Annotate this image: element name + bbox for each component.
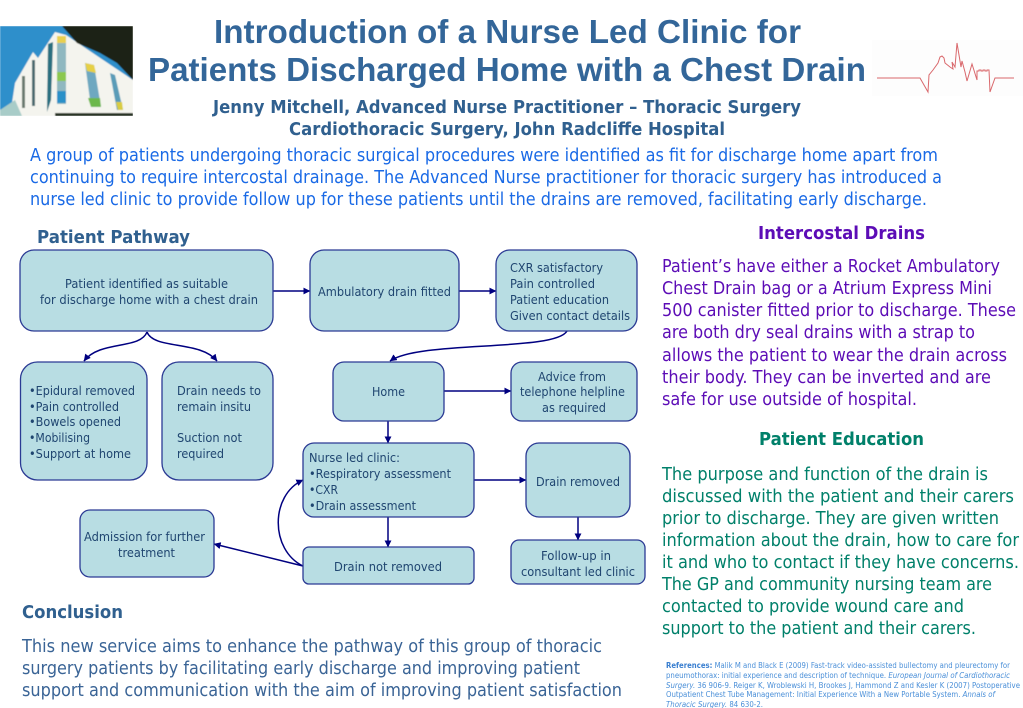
box: telephone helpline advice: telephone helpline (520, 384, 625, 399)
intercostal drains text: Chest Drain bag or a Atrium Express Mini (662, 279, 992, 299)
box: follow-up in consultant led clinic: consultant led clinic (521, 564, 635, 579)
box: CXR satisfactory: CXR satisfactory (510, 260, 604, 275)
box: follow-up in consultant led clinic (511, 540, 645, 584)
patient education text: support to the patient and their carers. (662, 619, 976, 639)
box: telephone helpline advice: Advice from (538, 369, 606, 384)
arrow: drain removed to follow-up (577, 517, 579, 540)
references (666, 661, 1020, 708)
arrow: home to advice (444, 390, 511, 392)
arrow: identified to ambulatory drain (273, 290, 310, 292)
box: drain removed: Drain removed (536, 474, 620, 489)
intercostal drains text: are both dry seal drains with a strap to (662, 323, 975, 343)
box: discharge criteria: •Mobilising (29, 430, 90, 445)
arrow: home to nurse led clinic (387, 421, 389, 443)
box: drain needs to remain: Suction not (177, 430, 242, 445)
arrow: CXR box to home (390, 331, 567, 361)
box: CXR satisfactory (496, 250, 637, 331)
box: home (333, 362, 444, 421)
logo: ECG heartbeat line (872, 40, 1023, 96)
references: pneumothorax: initial experience and description of technique. European Journal of Cardiothoracic (666, 671, 1011, 680)
arrow: ambulatory drain to CXR (459, 290, 496, 292)
intercostal drains text: safe for use outside of hospital. (662, 390, 917, 410)
arrow: nurse led clinic to drain not removed (387, 517, 389, 547)
introduction text: A group of patients undergoing thoracic surgical procedures were identified as fit for discharge home apart from (30, 146, 938, 166)
heading: Conclusion: Conclusion (22, 603, 123, 623)
box: nurse led clinic (303, 443, 474, 517)
patient education text: The purpose and function of the drain is (661, 465, 988, 485)
box: nurse led clinic: •Drain assessment (309, 498, 416, 513)
box: patient identified: for discharge home with a chest drain (40, 292, 258, 307)
box: drain needs to remain: remain insitu (177, 399, 251, 414)
heading: Patient Pathway: Patient Pathway (37, 228, 191, 248)
box: nurse led clinic: Nurse led clinic: (309, 450, 400, 465)
intercostal drains text: their body. They can be inverted and are (662, 368, 991, 388)
arrow: drain not removed to admission (214, 544, 303, 566)
title: Patients Discharged Home with a Chest Drain (148, 51, 866, 88)
references: Outpatient Chest Tube Management: Initial Experience With a New Portable System. Annals of (666, 690, 996, 699)
title: Introduction of a Nurse Led Clinic for (214, 13, 801, 50)
box: discharge criteria: •Bowels opened (29, 414, 121, 429)
box: drain not removed: Drain not removed (334, 559, 442, 574)
intercostal drains text: Patient’s have either a Rocket Ambulatory (662, 257, 1000, 277)
box: patient identified (20, 250, 273, 331)
arrow: drain not removed back to clinic (278, 480, 303, 566)
box: drain needs to remain (162, 362, 273, 480)
box: discharge criteria: •Pain controlled (29, 399, 119, 414)
authors and affiliation: Cardiothoracic Surgery, John Radcliffe Hospital (289, 120, 725, 140)
box: admission for further treatment: treatment (118, 545, 175, 560)
box: CXR satisfactory: Given contact details (510, 308, 630, 323)
box: admission for further treatment: Admission for further (84, 529, 206, 544)
photo: hospital building (0, 26, 133, 116)
introduction text: nurse led clinic to provide follow up for these patients until the drains are removed, facilitating early discharge. (30, 190, 927, 210)
introduction text: continuing to require intercostal drainage. The Advanced Nurse practitioner for thoracic surgery has introduced a (30, 168, 942, 188)
arrow: identified to drain insitu box (147, 332, 217, 361)
box: ambulatory drain fitted (310, 250, 459, 331)
box: nurse led clinic: •Respiratory assessment (309, 466, 451, 481)
conclusion text: surgery patients by facilitating early discharge and improving patient (22, 659, 580, 679)
box: drain removed (526, 443, 630, 517)
conclusion text: support and communication with the aim of improving patient satisfaction (22, 681, 622, 701)
box: telephone helpline advice: as required (542, 400, 606, 415)
box: discharge criteria (20, 362, 147, 480)
conclusion text (21, 637, 622, 701)
patient education text (661, 465, 1020, 639)
box: admission for further treatment (80, 510, 214, 577)
box: nurse led clinic: •CXR (309, 482, 338, 497)
introduction text (30, 146, 942, 210)
intercostal drains text (662, 257, 1016, 410)
box: drain needs to remain: Drain needs to (177, 383, 261, 398)
box: ambulatory drain fitted: Ambulatory drain fitted (318, 284, 451, 299)
box: patient identified: Patient identified as suitable (65, 276, 228, 291)
conclusion text: This new service aims to enhance the pathway of this group of thoracic (21, 637, 602, 657)
heading: Patient Education: Patient Education (759, 430, 924, 450)
arrow: identified to epidural box (84, 332, 147, 361)
patient education text: contacted to provide wound care and (662, 597, 964, 617)
patient education text: prior to discharge. They are given written (662, 509, 999, 529)
box: discharge criteria: •Support at home (29, 446, 131, 461)
box: drain needs to remain: required (177, 446, 224, 461)
box: CXR satisfactory: Patient education (510, 292, 609, 307)
heading: Intercostal Drains: Intercostal Drains (758, 224, 925, 244)
patient education text: The GP and community nursing team are (661, 575, 992, 595)
authors and affiliation: Jenny Mitchell, Advanced Nurse Practitioner – Thoracic Surgery (212, 98, 802, 118)
arrow: nurse led clinic to drain removed (474, 479, 526, 481)
box: home: Home (372, 384, 405, 399)
box: follow-up in consultant led clinic: Follow-up in (541, 548, 611, 563)
box: telephone helpline advice (511, 362, 637, 421)
title (148, 13, 866, 88)
box: discharge criteria: •Epidural removed (29, 383, 135, 398)
box: CXR satisfactory: Pain controlled (510, 276, 595, 291)
box: drain not removed (303, 547, 474, 584)
authors and affiliation (212, 98, 802, 140)
